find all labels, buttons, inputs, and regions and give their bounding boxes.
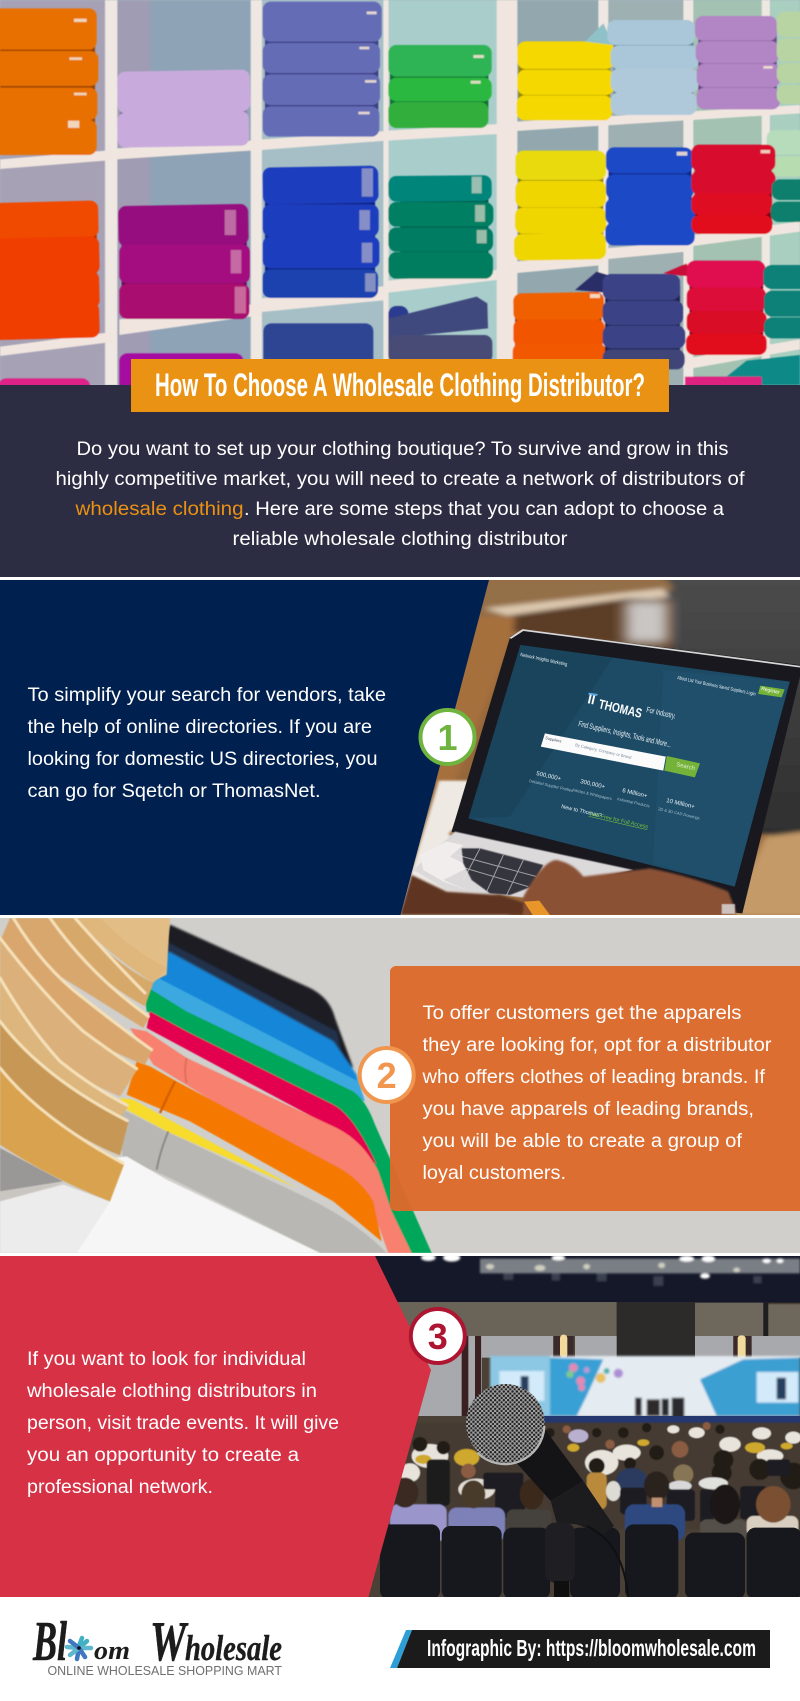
panel 2 text: [421, 1003, 772, 1184]
title banner: [131, 359, 669, 412]
panel 1 text: [28, 685, 386, 802]
panel 1: laptop photo: About List Your Business Saved Suppliers Login: [677, 675, 756, 698]
footer logo: ONLINE WHOLESALE SHOPPING MART: [48, 1663, 282, 1678]
icon: flower in logo: [67, 1638, 91, 1659]
panel 3 text: you an opportunity to create a: [27, 1445, 299, 1466]
panel 1 text: the help of online directories. If you are: [28, 717, 372, 738]
crimson stack: [663, 263, 690, 277]
intro panel background: [0, 385, 800, 577]
footer logo: W: [150, 1611, 189, 1673]
stage backdrop: [490, 1356, 800, 1418]
panel 3: conference photo: [340, 1254, 800, 1599]
panel 1: laptop photo: II: [586, 691, 597, 708]
panel 1: laptop photo: THOMAS: [597, 696, 644, 721]
intro text: reliable wholesale clothing distributor: [232, 529, 568, 550]
number badge 1: 1: [437, 717, 458, 758]
microphone: [466, 1384, 628, 1599]
periwinkle stack: [263, 2, 382, 137]
red-orange stack: [0, 200, 100, 340]
panel 2 text: who offers clothes of leading brands. If: [421, 1067, 766, 1088]
panel 3 text: person, visit trade events. It will give: [27, 1413, 339, 1434]
panel 1: laptop photo: 10 Million+: [666, 798, 695, 811]
teal stack 2: [763, 265, 800, 338]
hero photo: clothing shelves: [0, 0, 800, 395]
panel 1: laptop photo: 500,000+: [536, 771, 562, 783]
panel 1: laptop photo: 2D & 3D CAD Drawings: [658, 806, 700, 821]
yellow stack lower: [514, 151, 606, 261]
intro text: Do you want to set up your clothing boutique? To survive and grow in this: [76, 439, 728, 460]
blue stack: [262, 166, 379, 298]
purple stack: [695, 16, 780, 109]
footer logo: holesale: [185, 1628, 282, 1668]
number badge 3: [411, 1309, 465, 1363]
light blue stack: [585, 20, 698, 115]
panel 2 text: you will be able to create a group of: [422, 1131, 743, 1152]
number badge 3: 3: [428, 1316, 448, 1357]
blue stack right: [605, 147, 695, 245]
intro text: . Here are some steps that you can adopt to choose a: [244, 499, 724, 520]
panel 1 text: To simplify your search for vendors, take: [28, 685, 386, 706]
panel 1: laptop photo: Network Insights Marketing: [520, 652, 568, 668]
laptop lid: [452, 629, 800, 913]
panel 1: laptop photo: Suppliers: [545, 735, 562, 744]
navy lower stack: [388, 297, 488, 338]
panel 1: navy background: [0, 580, 489, 915]
panel 1: laptop photo: By Category, Company or Brand: [575, 742, 632, 760]
number badge 2: 2: [377, 1055, 397, 1096]
panel 1: laptop photo: Detailed Supplier Profiles: [529, 778, 574, 793]
audience: [340, 1422, 800, 1541]
panel 1: laptop photo: For Industry.: [646, 705, 677, 721]
panel 1: laptop photo: Register: [761, 686, 780, 696]
front row people: [390, 1504, 447, 1541]
yellow stack: [517, 41, 614, 120]
wall: [340, 1302, 800, 1416]
panel 2 text: they are looking for, opt for a distributor: [422, 1035, 772, 1056]
navy stack right: [575, 272, 613, 293]
panel 2 text: loyal customers.: [422, 1163, 566, 1184]
panel 1: laptop photo: 6 Million+: [622, 788, 648, 800]
panel 2: orange text box: [390, 966, 800, 1211]
panel 3 text: wholesale clothing distributors in: [26, 1381, 317, 1402]
number badge 2: [360, 1048, 414, 1102]
intro text: highly competitive market, you will need to create a network of distributors of: [56, 469, 745, 490]
panel 3: red arrow background: [0, 1256, 431, 1597]
green stack: [388, 45, 492, 128]
lavender stack: [117, 70, 250, 148]
panel 1: laptop photo: 300,000+: [580, 779, 606, 791]
orange lower stack: [513, 292, 606, 367]
keyboard, hand and arm: [400, 831, 738, 915]
magenta stack: [118, 204, 250, 319]
panel 3 text: If you want to look for individual: [27, 1349, 306, 1370]
panel 2: hanging shirts photo: [0, 918, 800, 1253]
chairs: [380, 1524, 800, 1599]
panel 1: laptop photo: Find Suppliers, Insights, Tools and More...: [578, 719, 672, 749]
hangers: [0, 918, 170, 1201]
panel 1 text: can go for Sqetch or ThomasNet.: [28, 781, 320, 802]
panel 1 text: looking for domestic US directories, you: [28, 749, 378, 770]
pale green stack: [767, 12, 800, 177]
panel 1: laptop photo: Join Free for Full Access: [589, 811, 649, 831]
intro text: [56, 439, 745, 550]
panel 3 text: professional network.: [27, 1477, 213, 1498]
footer credit: [390, 1630, 770, 1668]
number badge 1: [420, 710, 474, 764]
tags: [68, 12, 773, 313]
footer logo: Bl: [32, 1611, 67, 1673]
orange stack: [0, 8, 98, 155]
panel 2 text: you have apparels of leading brands,: [422, 1099, 754, 1120]
panel 1: laptop photo: Industrial Products: [617, 796, 650, 808]
teal stack: [388, 175, 493, 279]
panel 1: laptop photo: Articles & Whitepapers: [572, 787, 612, 801]
panel 3 text: [26, 1349, 339, 1498]
intro text: wholesale clothing: [74, 499, 244, 520]
red stack: [691, 145, 775, 234]
panel 1: laptop photo: [357, 570, 800, 917]
teal right: [771, 179, 800, 222]
footer logo: [32, 1611, 282, 1678]
panel 1: laptop photo: New to Thomas?: [561, 804, 602, 819]
third row left stacks: [0, 306, 408, 395]
panel 1: laptop photo: Search: [676, 762, 695, 772]
panel 2 text: To offer customers get the apparels: [422, 1003, 742, 1024]
footer logo: om: [94, 1636, 130, 1665]
right crop stacks: [388, 12, 800, 387]
